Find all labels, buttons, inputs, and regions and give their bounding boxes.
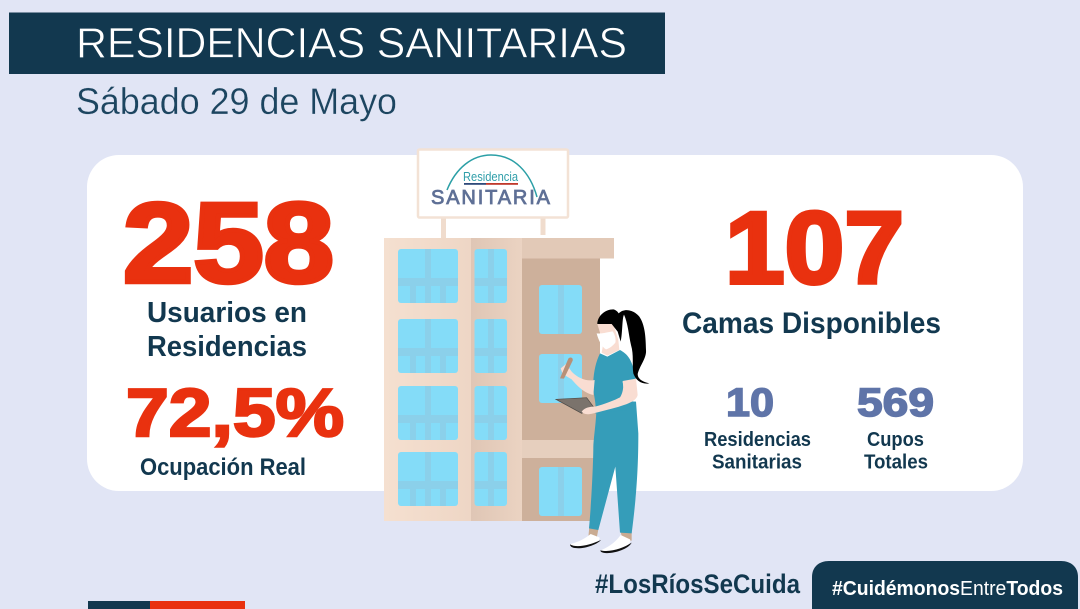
tab: Cuidemonos Entre Todos: #CuidémonosEntreTodos — [832, 578, 1063, 600]
stat: total places: Totales — [864, 452, 928, 474]
stat: available beds: Camas Disponibles — [682, 307, 941, 340]
stat: real occupancy: Ocupación Real — [140, 454, 306, 481]
stat: users in residences — [123, 180, 334, 363]
stat: available beds — [682, 191, 941, 340]
stat: real occupancy — [126, 375, 344, 481]
stat: users in residences: Usuarios en — [147, 297, 307, 329]
nurse upper body — [556, 309, 649, 414]
sign: Residencia Sanitaria logo: Residencia — [463, 170, 518, 184]
stat: total places: Cupos — [867, 429, 924, 451]
title banner — [9, 12, 665, 74]
nurse forearm — [582, 379, 638, 414]
nurse legs and feet — [570, 400, 638, 553]
nurse hair — [597, 309, 649, 384]
stat: users in residences: Residencias — [147, 331, 307, 363]
nurse raised arm — [561, 364, 595, 395]
nurse face mask — [597, 331, 616, 349]
stat: users in residences: 258 — [123, 180, 334, 306]
stat: available beds: 107 — [725, 191, 904, 305]
accent bar — [88, 601, 245, 609]
stat: total places: 569 — [857, 381, 934, 425]
illustration: building — [384, 216, 614, 521]
hashtag: Los Rios Se Cuida: #LosRíosSeCuida — [595, 569, 801, 599]
stat: real occupancy: 72,5% — [126, 375, 344, 451]
illustration: nurse with clipboard — [556, 309, 649, 553]
date subtitle: Sábado 29 de Mayo — [76, 81, 397, 122]
title banner: RESIDENCIAS SANITARIAS — [76, 20, 627, 68]
stat: total places — [857, 381, 934, 474]
stat: sanitary residences count: Sanitarias — [712, 452, 802, 474]
panel: white statistics card — [87, 155, 1023, 491]
stat: sanitary residences count: Residencias — [704, 429, 811, 451]
sign: Residencia Sanitaria logo — [418, 150, 568, 218]
nurse clipboard — [556, 398, 593, 413]
stat: sanitary residences count: 10 — [726, 381, 774, 425]
nurse neck and face — [597, 324, 619, 356]
sign: Residencia Sanitaria logo: SANITARIA — [431, 187, 551, 209]
nurse shirt — [593, 350, 636, 413]
tab: Cuidemonos Entre Todos — [812, 561, 1078, 609]
stat: sanitary residences count — [704, 381, 811, 474]
nurse pen — [560, 358, 573, 379]
